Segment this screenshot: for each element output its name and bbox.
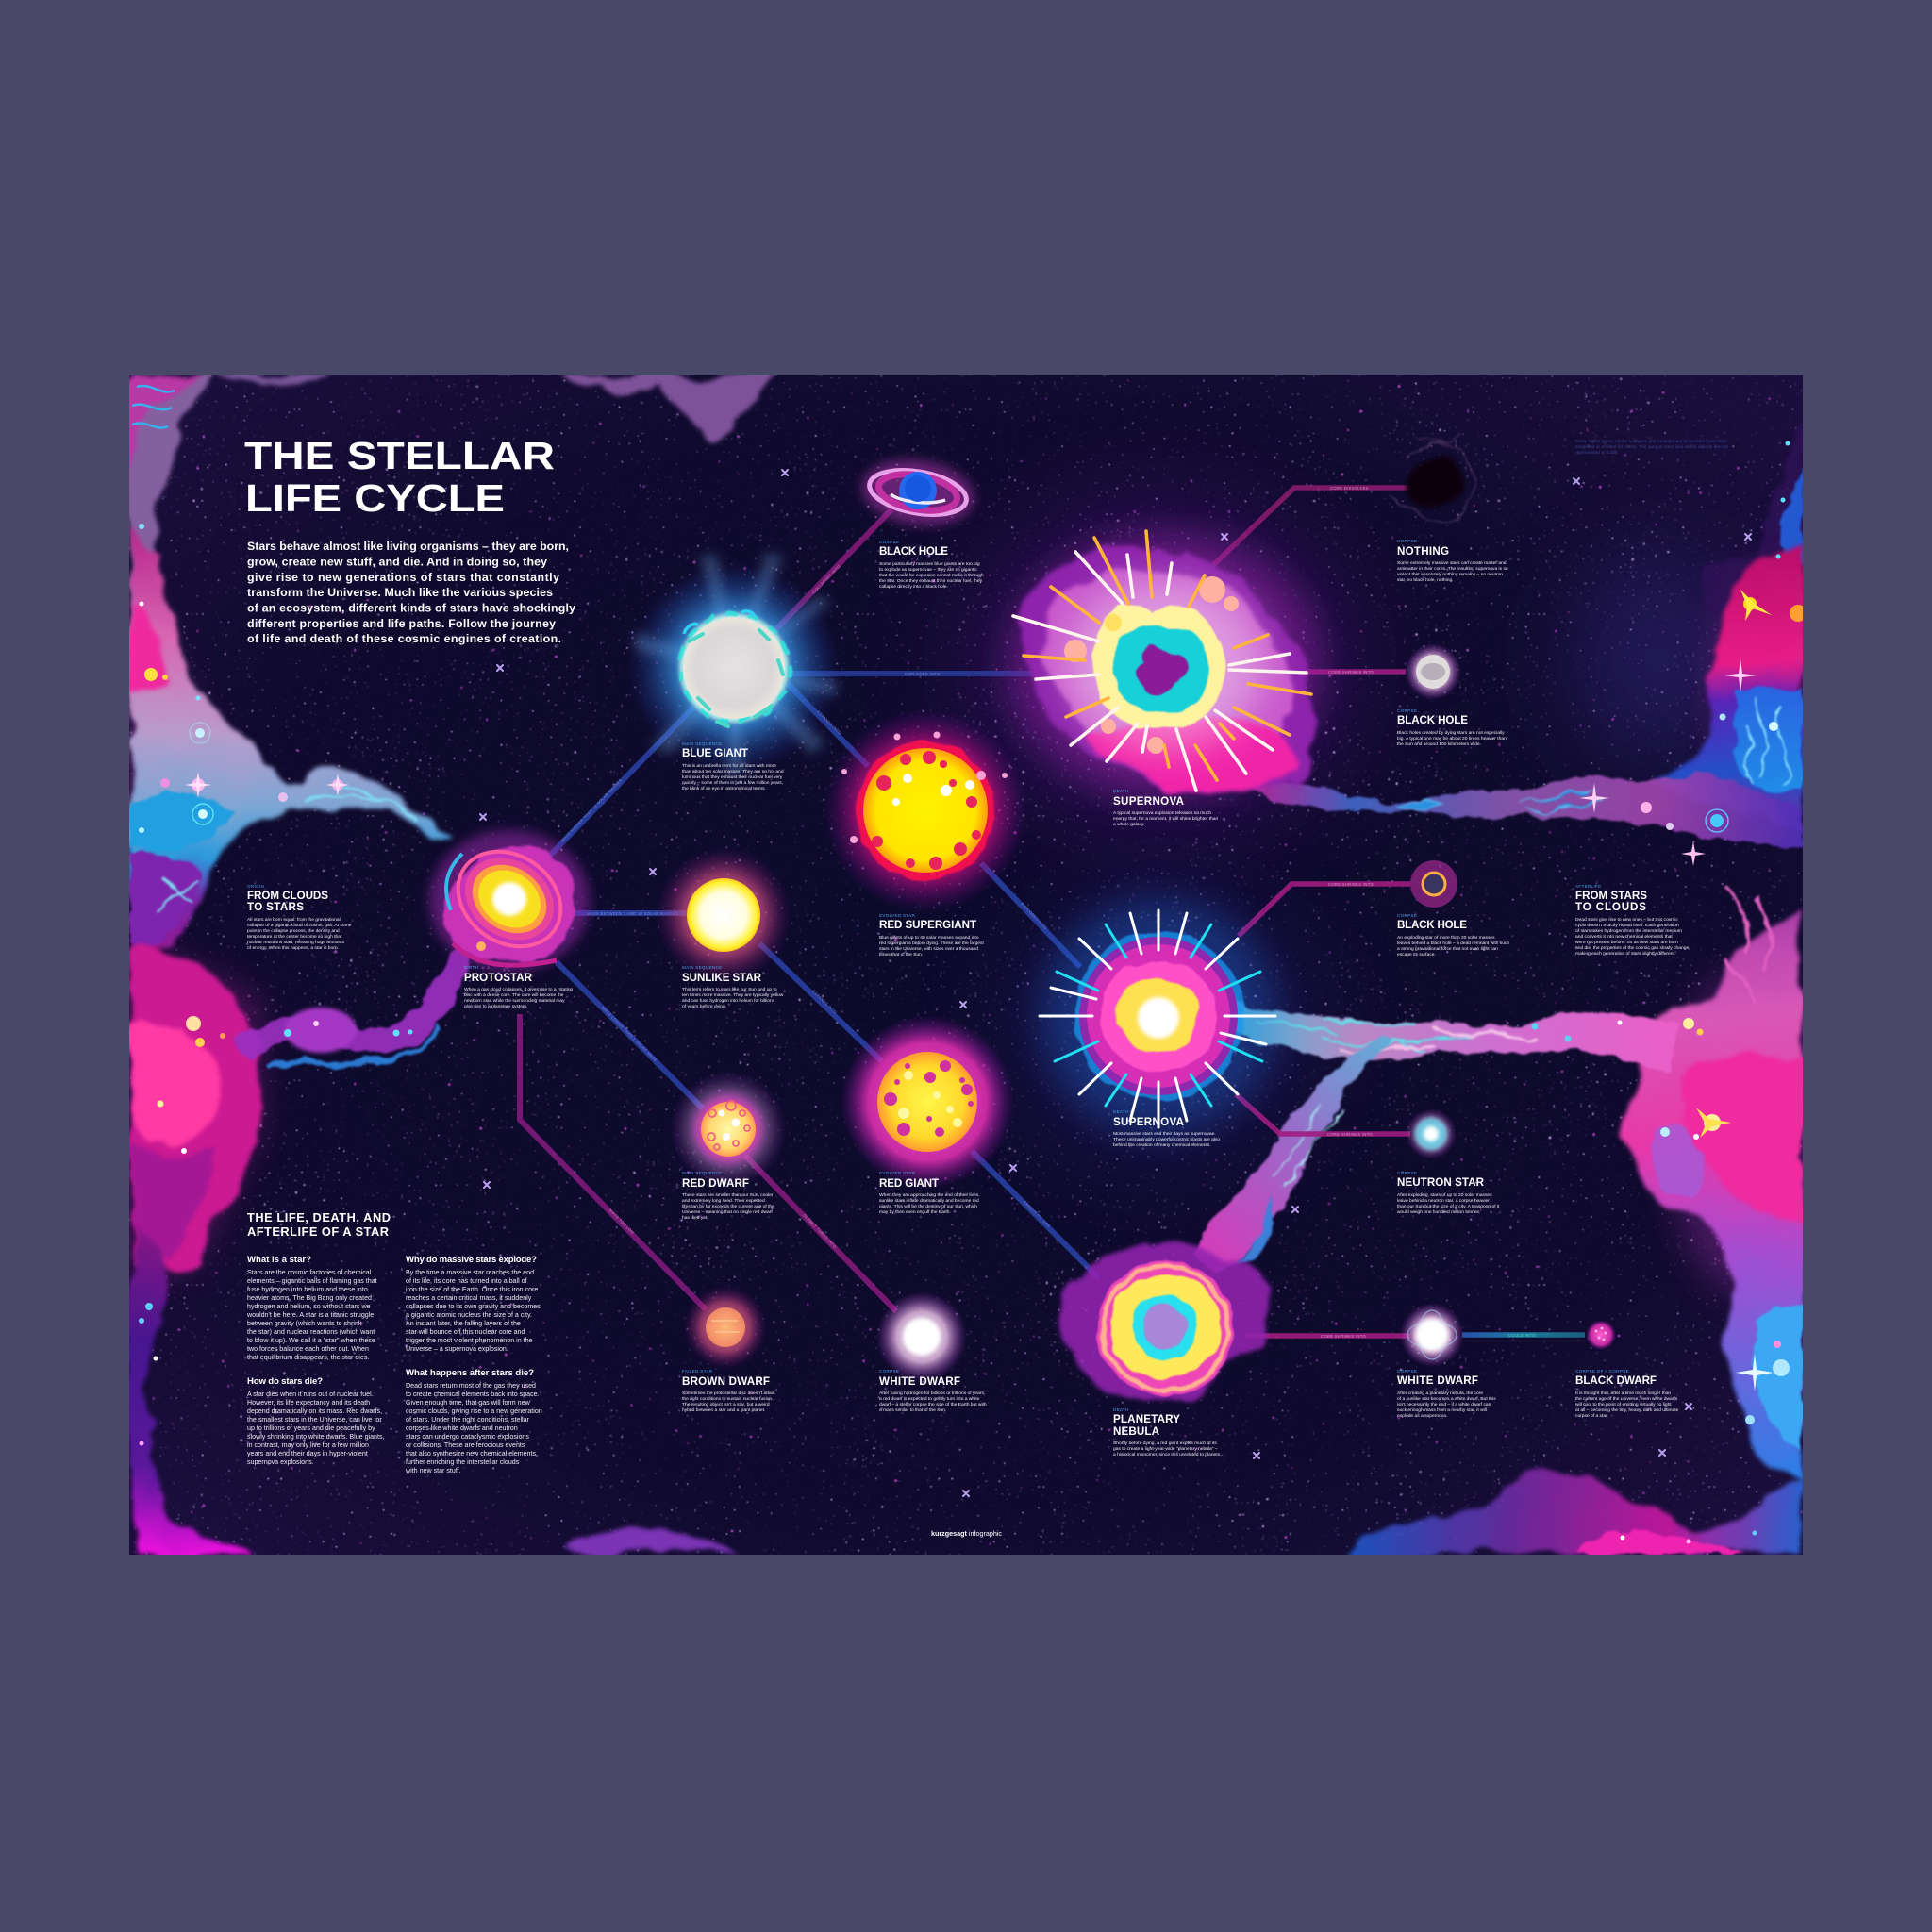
text: protostar: newborn star, while the surrounding material may	[464, 998, 565, 1004]
faq: why do massive stars explode: reaches a certain critical mass, it suddenly	[406, 1294, 532, 1302]
nebula: right lower mass	[1627, 887, 1821, 1486]
faq: how do stars die: years and end their days in hyper-violent	[247, 1450, 368, 1457]
text: brown dwarf: the right conditions to sustain nuclear fusion.	[682, 1396, 774, 1402]
faq: what happens after stars die: What happens after stars die?	[406, 1368, 534, 1378]
text: protostar: give rise to a planetary system.	[464, 1004, 527, 1009]
text: nothing: violent that absolutely nothing remains – no neutron	[1397, 572, 1503, 577]
faq: what is a star	[246, 1255, 377, 1361]
text: neutron star: CORPSE	[1397, 1171, 1417, 1175]
nebula: band between supernova and right mass	[1217, 1000, 1679, 1071]
text: life death and afterlife: AFTERLIFE OF A STAR	[247, 1224, 389, 1239]
connector: supernova to nothing: CORE DISSOLVES	[1330, 486, 1369, 491]
faq: what is a star: Stars are the cosmic factories of chemical	[247, 1269, 372, 1276]
faq: what is a star: the star) and nuclear reactions (which want	[247, 1328, 375, 1336]
text: brown dwarf: The resulting object isn't a star, but a weird	[682, 1402, 770, 1407]
text: planetary nebula	[1113, 1407, 1221, 1457]
text: from stars to clouds: of stars takes hydrogen from the interstellar medium	[1575, 928, 1682, 934]
text: from clouds to stars: FROM CLOUDS	[247, 890, 328, 902]
text: from stars to clouds: Dead stars give rise to new ones – but this cosmic	[1575, 917, 1678, 923]
text: planetary nebula: NEBULA	[1113, 1425, 1160, 1438]
text: red supergiant: times that of the Sun.	[879, 952, 923, 958]
text: from stars to clouds: FROM STARS	[1575, 890, 1647, 902]
text: blue giant: MAIN SEQUENCE	[682, 741, 722, 746]
nebula arch into protostar	[250, 960, 460, 1045]
icon: supernova two	[1040, 898, 1276, 1134]
faq: how do stars die: in contrast, may only live for a few million	[247, 1441, 369, 1449]
text: from stars to clouds: and converts it into new chemical elements that	[1575, 934, 1673, 940]
text: supernova one: a whole galaxy.	[1113, 822, 1144, 827]
text: blue giant: This is an umbrella term for all stars with more	[682, 763, 776, 769]
text: protostar	[464, 965, 574, 1009]
faq: why do massive stars explode	[406, 1255, 541, 1353]
faq: how do stars die: slowly shrinking into white dwarfs. Blue giants,	[247, 1433, 385, 1441]
text: neutron star: than our Sun but the size of a city. A teaspoon of it	[1397, 1204, 1500, 1209]
text: protostar: BIRTH	[464, 965, 478, 970]
nebula: top blob	[552, 375, 775, 440]
text: black hole two: Black holes created by dying stars are not especially	[1397, 730, 1505, 736]
text: red dwarf: Universe – meaning that no single red dwarf	[682, 1209, 773, 1215]
faq: what happens after stars die	[405, 1368, 542, 1474]
disclaimer note: Many stellar types, stellar subtypes and evolutionary processes have been	[1575, 439, 1727, 444]
text: from stars to clouds	[1575, 884, 1690, 957]
connector: red dwarf to white dwarf	[745, 1156, 896, 1311]
faq: what happens after stars die: corpses like white dwarfs and neutron	[406, 1424, 518, 1432]
text: white dwarf one: a mass similar to that of the Sun.	[879, 1407, 946, 1413]
text: white dwarf two: isn't necessarily the end – if a white dwarf can	[1397, 1402, 1491, 1407]
title: LIFE CYCLE	[245, 476, 505, 520]
connector: sunlike star to red giant	[759, 943, 882, 1061]
text: red supergiant	[879, 913, 984, 958]
text: black dwarf: at all – becoming the tiny, heavy, dark and ultimate	[1575, 1407, 1679, 1413]
faq: why do massive stars explode: By the time a massive star reaches the end	[406, 1269, 534, 1276]
text: black hole top: CORPSE	[879, 540, 899, 544]
text: red dwarf	[682, 1171, 774, 1221]
text: black hole top	[879, 540, 984, 590]
text: blue giant	[682, 741, 784, 791]
text: red dwarf: lifespan by far exceeds the current age of the	[682, 1204, 774, 1209]
text: from stars to clouds: cycle doesn't exactly repeat itself. Each generation	[1575, 923, 1679, 928]
text: protostar: PROTOSTAR	[464, 972, 533, 984]
text: white dwarf two: WHITE DWARF	[1397, 1374, 1478, 1387]
intro text	[247, 540, 575, 645]
nebula: band from supernova to right edge	[1236, 764, 1803, 866]
text: supernova one: DEATH	[1113, 789, 1129, 793]
text: black hole two: CORPSE	[1397, 708, 1417, 713]
text: supernova two: SUPERNOVA	[1113, 1116, 1185, 1128]
text: black hole top: to explode as supernovae – they are so gigantic	[879, 567, 977, 573]
connector: supernova to neutron star: CORE SHRINKS INTO	[1327, 1132, 1374, 1137]
faq: what happens after stars die: or collisions. These are ferocious events	[406, 1441, 525, 1449]
text: neutron star: would weigh one hundred million tonnes.	[1397, 1209, 1480, 1215]
text: life death and afterlife	[246, 1210, 542, 1474]
text: supernova one	[1113, 789, 1218, 827]
connector: supernova to black hole lower: CORE SHRINKS INTO	[1328, 882, 1374, 887]
text: sunlike star	[682, 965, 784, 1009]
icon: red supergiant	[824, 708, 1027, 912]
text: black hole top: that the would-be explosion cannot make it through	[879, 573, 984, 578]
text: white dwarf one: CORPSE	[879, 1369, 899, 1374]
intro text: different properties and life paths. Follow the journey	[247, 617, 556, 630]
connector: protostar to brown dwarf: MASS TOO LOW	[608, 1208, 636, 1236]
intro text: grow, create new stuff, and die. And in doing so, they	[247, 555, 547, 568]
icon: white dwarf	[876, 1291, 967, 1382]
background haze	[953, 486, 1755, 1170]
faq: why do massive stars explode: trigger the most violent phenomenon in the	[406, 1337, 533, 1344]
intro text: of an ecosystem, different kinds of stars have shockingly	[247, 601, 575, 614]
text: from stars to clouds: making each generation of stars slightly different.	[1575, 951, 1675, 957]
text: life death and afterlife: THE LIFE, DEATH, AND	[247, 1210, 391, 1224]
sparkle stars	[480, 470, 1751, 1496]
text: white dwarf two: suck enough mass from a nearby star, it will	[1397, 1407, 1487, 1413]
faq: how do stars die: the smallest stars in the Universe, can live for	[247, 1416, 382, 1424]
nebula: left cloud	[129, 386, 456, 953]
text: black hole two: BLACK HOLE	[1397, 714, 1468, 726]
text: black dwarf: will cool to the point of emitting virtually no light	[1575, 1402, 1672, 1407]
text: neutron star	[1397, 1171, 1500, 1215]
text: red giant: giants. This will be the destiny of our Sun, which	[879, 1204, 977, 1209]
faq: what is a star: What is a star?	[247, 1255, 311, 1265]
text: blue giant: BLUE GIANT	[682, 747, 748, 759]
disclaimer note: simplified or omitted for clarity. The various stars and stellar objects are not	[1575, 444, 1728, 450]
text: supernova two: behind the creation of many chemical elements.	[1113, 1142, 1211, 1148]
connector: protostar to red dwarf: MASS LOWER THAN 1 SOLAR MASS	[601, 1005, 658, 1062]
text: red dwarf: has died yet.	[682, 1215, 708, 1221]
connector: protostar to sunlike star: MASS BETWEEN 1 AND 10 SOLAR MASSES	[587, 911, 678, 916]
space background	[129, 375, 1803, 1555]
faq: what is a star: heavier atoms. The Big Bang only created	[247, 1294, 372, 1302]
text: blue giant: than about ten solar masses. They are so hot and	[682, 769, 784, 774]
connector: protostar to blue giant	[542, 708, 693, 863]
connector: supernova to black hole	[1302, 670, 1406, 675]
connector: supernova to nothing	[1212, 486, 1412, 566]
text: neutron star: leave behind a neutron star, a corpse heavier	[1397, 1198, 1490, 1204]
text: red giant: When they are approaching the end of their lives,	[879, 1192, 980, 1198]
text: sunlike star: MAIN SEQUENCE	[682, 965, 722, 970]
faq: what happens after stars die: of stars. Under the right conditions, stellar	[406, 1416, 530, 1424]
text: from clouds to stars: of energy. When this happens, a star is born.	[247, 945, 339, 951]
faq: how do stars die	[247, 1376, 385, 1466]
icon: planetary nebula	[1057, 1246, 1275, 1405]
text: black dwarf: corpse of a star.	[1575, 1413, 1608, 1419]
text: supernova two: Most massive stars end their days as supernovae.	[1113, 1131, 1216, 1137]
faq: why do massive stars explode: a gigantic atomic nucleus the size of a city.	[406, 1311, 532, 1319]
text: red supergiant: RED SUPERGIANT	[879, 919, 976, 931]
faq: why do massive stars explode: iron the size of the Earth. Once this iron core	[406, 1286, 538, 1293]
text: white dwarf two: explode as a supernova.	[1397, 1413, 1447, 1419]
text: sunlike star: of years before dying.	[682, 1004, 726, 1009]
text: red supergiant: red supergiants before dying. These are the largest	[879, 941, 984, 946]
connector: red giant to planetary nebula	[972, 1151, 1099, 1278]
intro text: give rise to new generations of stars that constantly	[247, 571, 559, 584]
text: white dwarf one: a red dwarf is expected to gently turn into a white	[879, 1396, 980, 1402]
connector: supernova to black hole lower	[1239, 882, 1410, 936]
text: planetary nebula: gas to create a light-year-wide "planetary nebula" –	[1113, 1446, 1218, 1452]
text: nothing: star, no black hole, nothing.	[1397, 577, 1454, 583]
faq: what happens after stars die: to create chemical elements back into space.	[406, 1391, 540, 1398]
text: blue giant: the blink of an eye in astronomical terms.	[682, 786, 766, 791]
icon: black hole shrink	[1405, 643, 1461, 700]
connector: white dwarf to black dwarf	[1462, 1333, 1585, 1338]
faq: why do massive stars explode: Why do massive stars explode?	[406, 1255, 537, 1265]
connector: red giant to planetary nebula: EXPELS ITS GAS	[1023, 1200, 1051, 1228]
connector: red dwarf to white dwarf: SLOWLY TURNS INTO	[802, 1213, 838, 1250]
icon: red dwarf	[670, 1071, 787, 1188]
text: black hole three: CORPSE	[1397, 913, 1417, 918]
text: nothing: CORPSE	[1397, 539, 1417, 543]
icon: blue giant	[628, 553, 840, 775]
text: red dwarf: RED DWARF	[682, 1177, 749, 1190]
text: brown dwarf: hybrid between a star and a giant planet.	[682, 1407, 765, 1413]
text: planetary nebula: Shortly before dying, a red giant expels much of its	[1113, 1441, 1217, 1446]
text: red giant: sunlike stars inflate dramatically and become red	[879, 1198, 979, 1204]
text: red giant: RED GIANT	[879, 1177, 939, 1190]
faq: what happens after stars die: further enriching the interstellar clouds	[406, 1458, 520, 1466]
faq: why do massive stars explode: of its life, its core has turned into a ball of	[406, 1277, 527, 1285]
text: brown dwarf	[682, 1369, 775, 1413]
faq: how do stars die: A star dies when it runs out of nuclear fuel.	[247, 1391, 374, 1398]
text: protostar: disc with a dense core. The core will become the	[464, 992, 564, 998]
text: from clouds to stars: TO STARS	[247, 901, 304, 913]
text: supernova one: A typical supernova explosion releases so much	[1113, 810, 1211, 816]
faq: what happens after stars die: stars can undergo cataclysmic explosions	[406, 1433, 529, 1441]
icon: black hole top	[858, 453, 978, 532]
faq: what is a star: wouldn't be here. A star is a titanic struggle	[246, 1311, 374, 1319]
nebula: lower left strip	[129, 1226, 247, 1555]
text: planetary nebula: a historical misnomer, since it is unrelated to planets.	[1113, 1452, 1221, 1457]
text: sunlike star: ten times more massive. They are typically yellow	[682, 992, 784, 998]
text: black hole three: An exploding star of more than 20 solar masses	[1397, 935, 1495, 941]
connector: protostar to red dwarf	[557, 962, 703, 1108]
text: nothing: antimatter in their cores. The resulting supernova is so	[1397, 566, 1508, 572]
text: black hole three: a strong gravitational force that not even light can	[1397, 946, 1498, 952]
connector: red supergiant to supernova	[981, 863, 1080, 967]
faq: how do stars die: up to trillions of years and die peacefully by	[247, 1424, 375, 1432]
faq: what happens after stars die: cosmic clouds, giving rise to a new generation	[406, 1407, 542, 1415]
text: black hole three: escape its surface.	[1397, 952, 1436, 958]
text: neutron star: After exploding, stars of up to 20 solar masses	[1397, 1192, 1492, 1198]
text: black hole three	[1397, 913, 1509, 958]
faq: how do stars die: depend dramatically on its mass. Red dwarfs,	[247, 1407, 382, 1415]
faq: how do stars die: However, its life expectancy and its death	[247, 1399, 370, 1407]
nebula: left side glow	[129, 566, 255, 1274]
faq: why do massive stars explode: collapses due to its own gravity and becomes	[406, 1303, 541, 1310]
connector: blue giant to red supergiant	[788, 684, 868, 766]
text: from clouds to stars: ORIGIN	[247, 884, 264, 889]
text: black hole two: big. A typical one may be about 20 times heavier than	[1397, 736, 1507, 741]
connector: white dwarf to black dwarf: COULD INTO	[1508, 1333, 1536, 1338]
logo: kurzgesagt infographic: kurzgesagt infographic	[931, 1529, 1002, 1538]
faq: what is a star: that equilibrium disappears, the star dies.	[247, 1354, 369, 1361]
text: supernova two: DEATH	[1113, 1109, 1129, 1114]
text: red supergiant: Blue giants of up to 40 solar masses expand into	[879, 935, 979, 941]
icon: black hole ring	[1410, 860, 1457, 908]
faq: what happens after stars die: that also synthesize new chemical elements,	[406, 1450, 538, 1457]
text: white dwarf two: of a sunlike star becomes a white dwarf. But this	[1397, 1396, 1496, 1402]
text: black hole top: BLACK HOLE	[879, 545, 948, 558]
text: nothing: NOTHING	[1397, 545, 1449, 558]
text: from stars to clouds: were not present before. So as new stars are born	[1575, 940, 1678, 945]
connector: blue giant to supernova: EXPLODES INTO	[905, 672, 941, 676]
text: white dwarf one: After fusing hydrogen for billions or trillions of years,	[879, 1391, 985, 1396]
text: black hole three: leaves behind a black hole – a dead remnant with such	[1397, 941, 1509, 946]
text: from stars to clouds: and die, the properties of the cosmic gas slowly change,	[1575, 945, 1690, 951]
text: from stars to clouds: AFTERLIFE	[1575, 884, 1601, 889]
text: black dwarf: CORPSE OF A CORPSE	[1575, 1369, 1629, 1374]
connector: protostar to blue giant: MASS HIGHER THAN 10 SOLAR MASSES	[559, 777, 623, 842]
text: white dwarf two	[1397, 1369, 1496, 1419]
text: from clouds to stars: temperature at the center become so high that	[247, 934, 342, 940]
disclaimer note	[1575, 439, 1728, 456]
faq: how do stars die: How do stars die?	[247, 1376, 323, 1387]
text: black hole two	[1397, 708, 1507, 747]
text: neutron star: NEUTRON STAR	[1397, 1176, 1485, 1189]
faq: what is a star: between gravity (which wants to shrink	[247, 1320, 362, 1327]
faq: what happens after stars die: with new star stuff.	[405, 1467, 461, 1474]
text: red giant: may by then even engulf the Earth.	[879, 1209, 951, 1215]
title: THE STELLAR	[244, 434, 555, 477]
text: from clouds to stars: All stars are born equal: from the gravitational	[247, 917, 341, 923]
text: black hole top: collapse directly into a black hole.	[879, 584, 948, 590]
connector: planetary nebula to white dwarf: CORE SHRINKS INTO	[1321, 1334, 1367, 1339]
text: brown dwarf: FAILED STAR	[682, 1369, 713, 1374]
text: white dwarf one	[879, 1369, 987, 1413]
text: brown dwarf: BROWN DWARF	[682, 1375, 770, 1388]
text: planetary nebula: PLANETARY	[1113, 1413, 1180, 1425]
text: red giant	[879, 1171, 980, 1215]
text: red supergiant: stars in the Universe, with sizes over a thousand	[879, 946, 978, 952]
text: black dwarf: the current age of the universe, even white dwarfs	[1575, 1396, 1678, 1402]
text: from clouds to stars	[247, 884, 352, 951]
text: white dwarf one: dwarf – a stellar corpse the size of the Earth but with	[879, 1402, 987, 1407]
icon: brown dwarf	[684, 1286, 767, 1369]
faq: what happens after stars die: Dead stars return most of the gas they used	[406, 1382, 536, 1390]
intro text: of life and death of these cosmic engines of creation.	[247, 632, 561, 645]
text: blue giant: luminous that they exhaust their nuclear fuel very	[682, 774, 783, 780]
text: red dwarf: MAIN SEQUENCE	[682, 1171, 722, 1175]
text: planetary nebula: DEATH	[1113, 1407, 1129, 1412]
text: white dwarf one: WHITE DWARF	[879, 1375, 960, 1388]
text: nothing	[1397, 539, 1508, 583]
faq: why do massive stars explode: Universe – a supernova explosion.	[406, 1345, 508, 1353]
connector: supernova to neutron star	[1236, 1094, 1410, 1137]
poster	[129, 375, 1821, 1555]
icon: red giant	[841, 1015, 1014, 1189]
text: sunlike star: This term refers to stars like our Sun and up to	[682, 987, 777, 992]
faq: what is a star: two forces balance each other out. When	[247, 1345, 369, 1353]
nebula: stream to planetary nebula	[1193, 1036, 1391, 1274]
text: black dwarf: It is thought that, after a time much longer than	[1575, 1391, 1671, 1396]
text: black hole three: BLACK HOLE	[1397, 919, 1467, 931]
text: white dwarf two: CORPSE	[1397, 1369, 1417, 1374]
disclaimer note: represented to scale.	[1575, 450, 1619, 456]
icon: protostar	[429, 830, 590, 972]
icon: sunlike star	[656, 847, 791, 983]
text: red giant: EVOLVED STAR	[879, 1171, 916, 1175]
connector: supernova to black hole: CORE SHRINKS INTO	[1328, 670, 1374, 675]
icon: neutron star	[1406, 1108, 1457, 1159]
nebula: bottom blob	[566, 1528, 734, 1555]
faq: what happens after stars die: Given enough time, that gas will form new	[406, 1399, 531, 1407]
connector: blue giant to red supergiant: EXPANDS INTO	[816, 709, 842, 736]
text: supernova two	[1113, 1109, 1220, 1148]
icon: black dwarf	[1586, 1320, 1616, 1350]
text: brown dwarf: Sometimes the protostellar disc doesn't attain	[682, 1391, 775, 1396]
icon: supernova one	[1009, 531, 1321, 797]
bright motes	[144, 668, 158, 681]
text: white dwarf two: After creating a planetary nebula, the core	[1397, 1391, 1483, 1396]
faq: how do stars die: supernova explosions.	[247, 1458, 314, 1466]
text: black hole top: Some particularly massive blue giants are too big	[879, 561, 980, 567]
text: black dwarf	[1575, 1369, 1679, 1419]
text: black dwarf: BLACK DWARF	[1575, 1374, 1657, 1387]
text: red dwarf: These stars are smaller than our Sun, cooler	[682, 1192, 774, 1198]
text: protostar: When a gas cloud collapses, it gives rise to a rotating	[464, 987, 574, 992]
intro text: transform the Universe. Much like the various species	[247, 586, 553, 599]
faq: why do massive stars explode: An instant later, the falling layers of the	[406, 1320, 521, 1327]
faq: what is a star: hydrogen and helium, so without stars we	[247, 1303, 371, 1310]
text: sunlike star: SUNLIKE STAR	[682, 972, 762, 984]
text: nothing: Some extremely massive stars can create matter and	[1397, 560, 1507, 566]
connector: blue giant to black hole	[774, 509, 891, 632]
nebula: left lower mass	[129, 943, 460, 1274]
nebula: right upper	[1651, 415, 1811, 830]
text: supernova one: energy that, for a moment, it will shine brighter than	[1113, 816, 1218, 822]
intro text: Stars behave almost like living organisms – they are born,	[247, 540, 569, 553]
text: supernova one: SUPERNOVA	[1113, 795, 1185, 808]
nebula: top left	[129, 375, 332, 630]
text: from stars to clouds: TO CLOUDS	[1575, 901, 1646, 913]
text: black hole two: the Sun and around 100 kilometers wide.	[1397, 741, 1481, 747]
connector: red supergiant to supernova: EXPLODES INTO	[1020, 902, 1048, 931]
nebula: bottom right	[1349, 1472, 1803, 1555]
connector: blue giant to black hole: COLLAPSES INTO	[811, 563, 841, 594]
faq: what is a star: fuse hydrogen into helium and these into	[247, 1286, 368, 1293]
text: black hole top: the star. Once they exhaust their nuclear fuel, they	[879, 578, 983, 584]
text: from clouds to stars: nuclear reactions start, releasing huge amounts	[247, 940, 345, 945]
pink highlights	[129, 604, 168, 696]
text: sunlike star: and can fuse hydrogen into helium for billions	[682, 998, 775, 1004]
text: red supergiant: EVOLVED STAR	[879, 913, 916, 918]
faq: what is a star: to blow it up). We call it a "star" when these	[247, 1337, 375, 1344]
text: blue giant: quickly – some of them in just a few million years,	[682, 780, 783, 786]
icon: nothing void	[1396, 434, 1474, 522]
text: red dwarf: and extremely long lived. Their expected	[682, 1198, 765, 1204]
text: supernova two: These unimaginably powerful cosmic blasts are also	[1113, 1137, 1220, 1142]
text: from clouds to stars: collapse of a gigantic cloud of cosmic gas. At some	[247, 923, 352, 928]
connector: sunlike star to red giant: EXPANDS INTO	[811, 989, 838, 1015]
star field	[129, 375, 1803, 1555]
connector: protostar to brown dwarf	[520, 1014, 706, 1309]
faq: why do massive stars explode: star will bounce off this nuclear core and	[406, 1328, 525, 1336]
title	[244, 434, 555, 520]
text: from clouds to stars: point in the collapse process, the density and	[247, 928, 340, 934]
spirals	[195, 728, 205, 738]
faq: what is a star: elements – gigantic balls of flaming gas that	[247, 1277, 377, 1285]
icon: white dwarf two	[1400, 1303, 1464, 1367]
